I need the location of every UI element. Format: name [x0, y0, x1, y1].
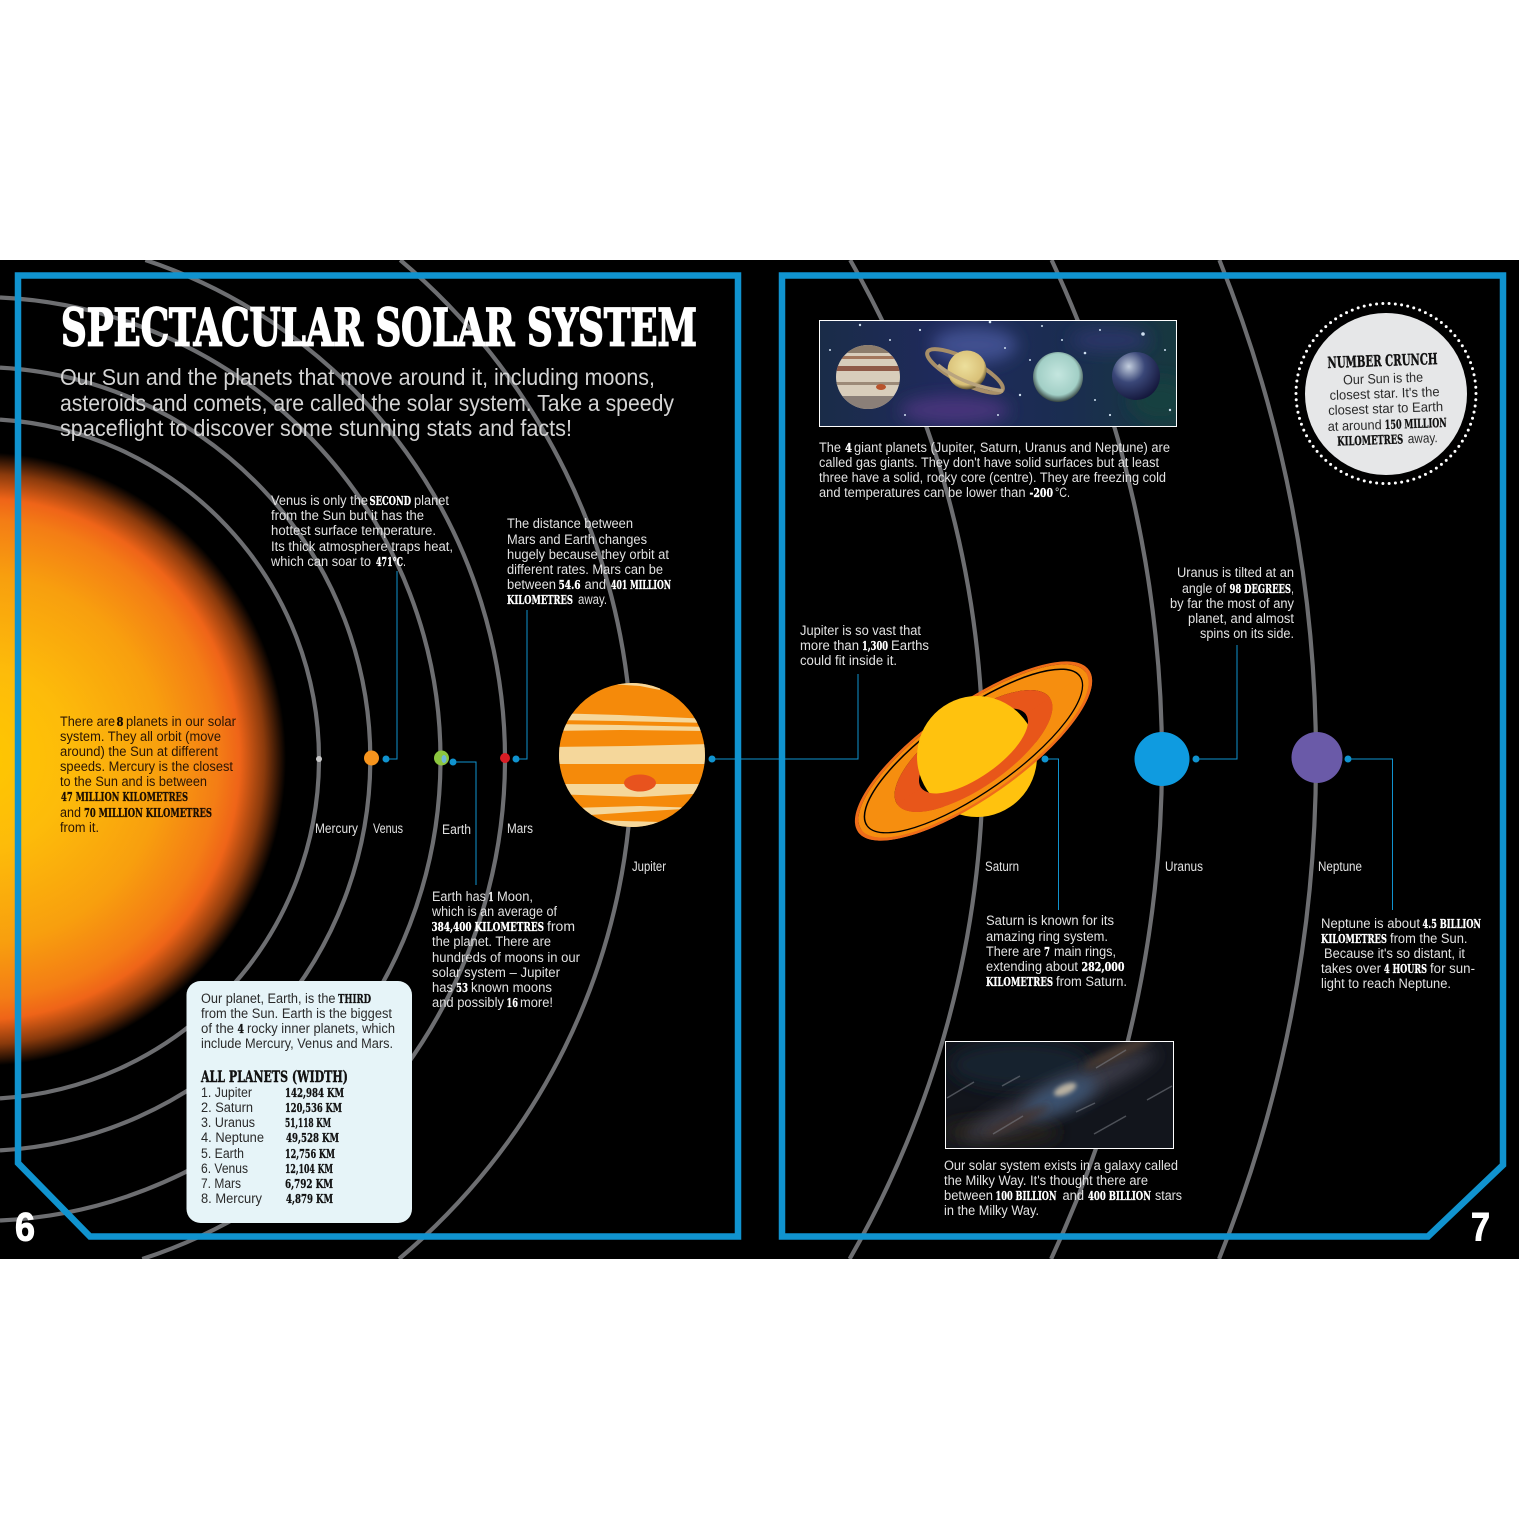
planet labels: Mercury — [315, 821, 358, 836]
text: Mars: away. — [578, 592, 607, 607]
text: Neptune: takes over — [1321, 961, 1381, 976]
text: Uranus: angle of — [1182, 581, 1226, 596]
planet labels: Venus — [373, 821, 403, 836]
image: Milky Way — [945, 1041, 1174, 1149]
text: gas giants: The — [819, 440, 841, 455]
text: gas giants: -200 — [1030, 485, 1053, 500]
text: Earth: Earth has — [432, 889, 486, 904]
intro paragraph: asteroids and comets, are called the solar system. Take a speedy — [60, 390, 674, 416]
planet width list: 1. Jupiter — [201, 1085, 252, 1100]
text: Earth: and possibly — [432, 995, 504, 1010]
photo planet: Neptune — [1112, 352, 1160, 400]
text: gas giants: three have a solid, rocky core (centre). They are freezing cold — [819, 470, 1166, 485]
text: Earth: which is an average of — [431, 904, 557, 919]
planet: Mercury — [316, 756, 322, 762]
text: Neptune: 4.5 BILLION — [1422, 916, 1481, 931]
callout: number crunch — [1296, 304, 1476, 484]
text: Mars: The distance between — [507, 516, 633, 531]
text: Neptune: from the Sun. — [1390, 931, 1468, 946]
planet width list: 3. Uranus — [201, 1115, 255, 1130]
photo planet: Saturn — [922, 341, 1008, 401]
text: Venus: SECOND — [370, 493, 411, 508]
text: Earth fact: 4 — [238, 1021, 244, 1036]
planet width list: 4,879 KM — [286, 1191, 333, 1206]
text: Venus: 471°C — [376, 554, 403, 569]
text: Mars: 401 MILLION — [611, 577, 671, 592]
heading: all planets: ALL PLANETS (WIDTH) — [200, 1067, 348, 1086]
planet width list: 8. Mercury — [201, 1191, 262, 1206]
text: Milky Way — [944, 1158, 1182, 1218]
photo planet: Jupiter — [836, 345, 900, 409]
text: Milky Way: in the Milky Way. — [944, 1203, 1039, 1218]
text: Uranus: , — [1291, 581, 1294, 596]
text: Jupiter: could fit inside it. — [800, 653, 897, 668]
callout: number crunch: away. — [1407, 430, 1438, 446]
planet width list: 4. Neptune — [201, 1130, 264, 1145]
planet width list: 12,104 KM — [285, 1161, 333, 1176]
text: Venus: hottest surface temperature. — [271, 523, 436, 538]
planet: Uranus — [1134, 732, 1190, 786]
connector: Venus — [382, 571, 397, 762]
text: Mars: different rates. Mars can be — [507, 562, 663, 577]
black spread background — [0, 260, 1519, 1259]
text: Sun and Mercury: speeds. Mercury is the closest — [60, 759, 233, 774]
text: Jupiter: Jupiter is so vast that — [800, 623, 921, 638]
text: Earth: the planet. There are — [432, 934, 551, 949]
planet width list: 142,984 KM — [285, 1085, 344, 1100]
connector: Uranus — [1192, 645, 1237, 762]
text: Earth: has — [432, 980, 453, 995]
text: Mars: 54.6 — [558, 577, 581, 592]
planet: Jupiter — [559, 683, 705, 827]
planet width list — [201, 1085, 344, 1206]
text: Neptune: light to reach Neptune. — [1321, 976, 1451, 991]
planet width list: 12,756 KM — [285, 1146, 335, 1161]
callout: number crunch: NUMBER CRUNCH — [1327, 349, 1438, 372]
planet labels: Earth — [442, 822, 471, 837]
planet: Saturn — [854, 661, 1092, 841]
planet width list: 120,536 KM — [285, 1100, 342, 1115]
text: Milky Way: Our solar system exists in a galaxy called — [944, 1158, 1178, 1173]
text: Jupiter — [800, 623, 929, 668]
text: Saturn: Saturn is known for its — [986, 913, 1114, 928]
intro paragraph: Our Sun and the planets that move around it, including moons, — [60, 364, 655, 390]
intro paragraph: spaceflight to discover some stunning stats and facts! — [60, 415, 572, 441]
text: Venus: Venus is only the — [271, 493, 368, 508]
white page margin: bottom — [0, 1259, 1519, 1519]
text: Earth: hundreds of moons in our — [432, 950, 580, 965]
text: Earth: 53 — [456, 980, 468, 995]
text: Neptune: Because it's so distant, it — [1324, 946, 1465, 961]
planet labels: Uranus — [1165, 859, 1203, 874]
planet: Earth — [434, 750, 449, 766]
text: Venus: planet — [414, 493, 449, 508]
text: gas giants: 4 — [845, 440, 852, 455]
text: gas giants: and temperatures can be lower than — [819, 485, 1026, 500]
text: Earth fact: include Mercury, Venus and Mars. — [201, 1036, 393, 1051]
text: Earth: more! — [520, 995, 553, 1010]
text: Saturn: amazing ring system. — [986, 929, 1108, 944]
text: Mars: between — [507, 577, 556, 592]
text: Sun and Mercury: 8 — [116, 714, 124, 729]
text: Venus: which can soar to — [270, 554, 371, 569]
text: gas giants — [819, 440, 1170, 500]
text: Earth fact — [201, 991, 395, 1051]
text: Earth: known moons — [471, 980, 552, 995]
text: Earth: from — [547, 919, 575, 934]
text: Earth fact: rocky inner planets, which — [247, 1021, 395, 1036]
text: Earth fact: Our planet, Earth, is the — [201, 991, 336, 1006]
text: Uranus: planet, and almost — [1188, 611, 1294, 626]
planet width list: 5. Earth — [201, 1146, 244, 1161]
text: Saturn: 7 — [1044, 944, 1050, 959]
planet: Mars — [500, 753, 510, 763]
callout: number crunch: closest star to Earth — [1328, 399, 1443, 418]
planet width list: 6,792 KM — [285, 1176, 333, 1191]
connector: Earth — [450, 758, 476, 885]
planet width list: 51,118 KM — [285, 1115, 331, 1130]
text: Venus: . — [403, 554, 406, 569]
planet labels — [315, 821, 1362, 874]
text: Neptune: 4 HOURS — [1384, 961, 1427, 976]
text: Sun and Mercury: and — [60, 805, 81, 820]
planet width list: 6. Venus — [201, 1161, 248, 1176]
text: Uranus: spins on its side. — [1200, 626, 1294, 641]
callout: number crunch: closest star. It's the — [1329, 384, 1440, 403]
text: Milky Way: 400 BILLION — [1088, 1188, 1151, 1203]
left page frame — [18, 276, 738, 1236]
text: Sun and Mercury: 70 MILLION KILOMETRES — [84, 805, 212, 820]
panel: planet widths — [186, 981, 412, 1223]
text: Milky Way: and — [1062, 1188, 1084, 1203]
text: Sun and Mercury — [60, 714, 236, 835]
text: Sun and Mercury: There are — [60, 714, 115, 729]
text: Sun and Mercury: planets in our solar — [126, 714, 236, 729]
text: Sun and Mercury: to the Sun and is between — [60, 774, 207, 789]
text: Uranus — [1170, 565, 1294, 641]
text: Jupiter: 1,300 — [862, 638, 888, 653]
text: Saturn: KILOMETRES — [986, 974, 1053, 989]
text: Neptune — [1321, 916, 1481, 991]
planet: Neptune — [1292, 732, 1342, 783]
text: Sun and Mercury: from it. — [60, 820, 99, 835]
text: Earth: solar system – Jupiter — [432, 965, 560, 980]
white page margin: top — [0, 0, 1519, 260]
planet width list: 49,528 KM — [286, 1130, 339, 1145]
page number 6: 6 — [15, 1206, 35, 1250]
text: Sun and Mercury: around) the Sun at different — [60, 744, 218, 759]
text: Mars: Mars and Earth changes — [507, 532, 647, 547]
text: Milky Way: the Milky Way. It's thought there are — [944, 1173, 1148, 1188]
text: Saturn: There are — [986, 944, 1041, 959]
connector: Neptune — [1344, 756, 1392, 910]
text: Earth: 1 — [488, 889, 494, 904]
text: Earth fact: of the — [201, 1021, 234, 1036]
text: Saturn: main rings, — [1054, 944, 1116, 959]
text: Uranus: 98 DEGREES — [1230, 581, 1291, 596]
text: Earth: 384,400 KILOMETRES — [432, 919, 544, 934]
planet: Venus — [364, 750, 379, 766]
planet labels: Jupiter — [632, 859, 666, 874]
connector: Jupiter — [708, 674, 858, 762]
text: Saturn: from Saturn. — [1056, 974, 1127, 989]
image: giant planets — [820, 320, 1190, 426]
text: Milky Way: stars — [1155, 1188, 1182, 1203]
text: Milky Way: 100 BILLION — [996, 1188, 1056, 1203]
page number 7: 7 — [1471, 1206, 1490, 1250]
right page frame — [782, 276, 1503, 1236]
text: Earth — [431, 889, 580, 1010]
text: Saturn: extending about — [986, 959, 1078, 974]
planet width list: 7. Mars — [201, 1176, 241, 1191]
planet labels: Mars — [507, 821, 533, 836]
text: gas giants: °C. — [1055, 485, 1070, 500]
text: Uranus: by far the most of any — [1170, 596, 1294, 611]
title: SPECTACULAR SOLAR SYSTEM — [61, 298, 697, 358]
text: Venus: Its thick atmosphere traps heat, — [271, 539, 453, 554]
text: Earth: Moon, — [497, 889, 533, 904]
connector: Saturn — [1042, 756, 1058, 910]
text: Sun and Mercury: 47 MILLION KILOMETRES — [61, 789, 188, 804]
text: Mars: and — [584, 577, 606, 592]
text: Mars: KILOMETRES — [507, 592, 573, 607]
text: Mars — [507, 516, 671, 607]
intro paragraph — [60, 364, 674, 441]
planet labels: Neptune — [1318, 859, 1362, 874]
text: Milky Way: between — [944, 1188, 993, 1203]
text: Jupiter: Earths — [891, 638, 929, 653]
text: Earth fact: from the Sun. Earth is the biggest — [201, 1006, 392, 1021]
text: Saturn — [986, 913, 1127, 989]
text: gas giants: giant planets (Jupiter, Saturn, Uranus and Neptune) are — [854, 440, 1170, 455]
text: Neptune: Neptune is about — [1321, 916, 1420, 931]
planet width list: 2. Saturn — [201, 1100, 253, 1115]
photo planet: Uranus — [1033, 352, 1083, 402]
callout: number crunch: at around — [1327, 417, 1382, 434]
text: Neptune: KILOMETRES — [1321, 931, 1387, 946]
planet labels: Saturn — [985, 859, 1019, 874]
connector: Mars — [512, 610, 527, 762]
text: Saturn: 282,000 — [1082, 959, 1125, 974]
text: Earth: 16 — [506, 995, 518, 1010]
callout: number crunch: 150 MILLION — [1384, 415, 1447, 432]
text: gas giants: called gas giants. They don't have solid surfaces but at least — [819, 455, 1159, 470]
planet orbits — [0, 260, 1316, 1259]
text: Uranus: Uranus is tilted at an — [1177, 565, 1294, 580]
callout: number crunch: Our Sun is the — [1343, 370, 1423, 387]
text: Mars: hugely because they orbit at — [507, 547, 669, 562]
text: Venus — [270, 493, 453, 569]
text: Neptune: for sun- — [1430, 961, 1475, 976]
sun — [0, 453, 286, 1065]
text: Venus: from the Sun but it has the — [271, 508, 424, 523]
callout: number crunch: KILOMETRES — [1337, 431, 1403, 449]
text: Earth fact: THIRD — [338, 991, 371, 1006]
text: Sun and Mercury: system. They all orbit (move — [60, 729, 221, 744]
text: Jupiter: more than — [800, 638, 859, 653]
